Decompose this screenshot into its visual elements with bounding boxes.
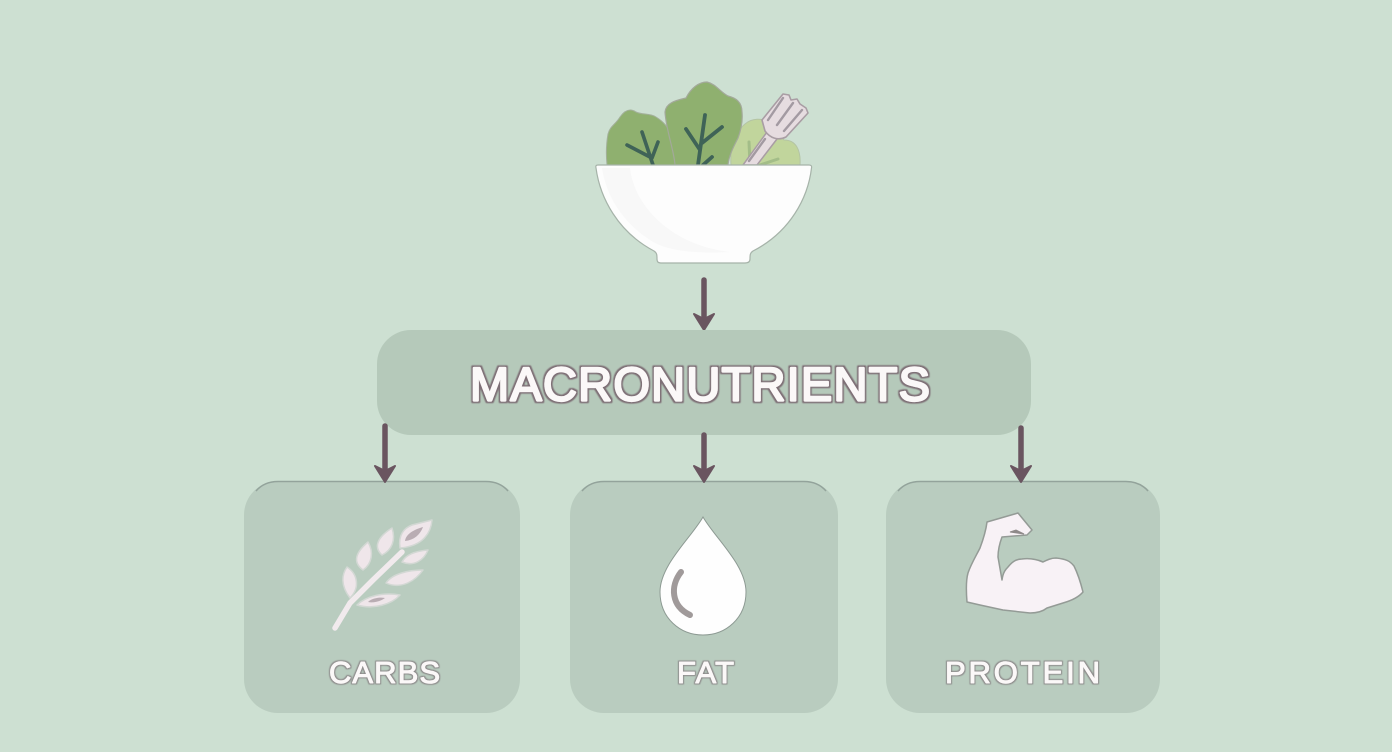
icon: wheat sprig <box>335 520 432 628</box>
fork <box>743 94 808 165</box>
left leaf <box>606 110 675 165</box>
heading: macronutrients: MACRONUTRIENTS <box>470 358 930 410</box>
arrow: bowl to macronutrients <box>694 280 714 330</box>
arrow: macronutrients to protein <box>1011 428 1031 482</box>
label: protein: PROTEIN <box>945 655 1100 690</box>
panel: macronutrients <box>377 330 1031 435</box>
back light leaf <box>731 119 800 165</box>
icon: droplet <box>660 517 746 635</box>
icon: salad bowl <box>596 82 812 263</box>
label: carbs: CARBS <box>329 655 440 690</box>
label: fat: FAT <box>677 655 734 690</box>
icon: flexed arm <box>966 513 1083 613</box>
arrow: macronutrients to carbs <box>375 426 395 482</box>
centre leaf <box>665 82 742 165</box>
panel: protein <box>886 481 1160 713</box>
panel: carbs <box>244 481 520 713</box>
arrow: macronutrients to fat <box>694 435 714 482</box>
panel: fat <box>570 481 838 713</box>
bowl body <box>596 165 812 263</box>
